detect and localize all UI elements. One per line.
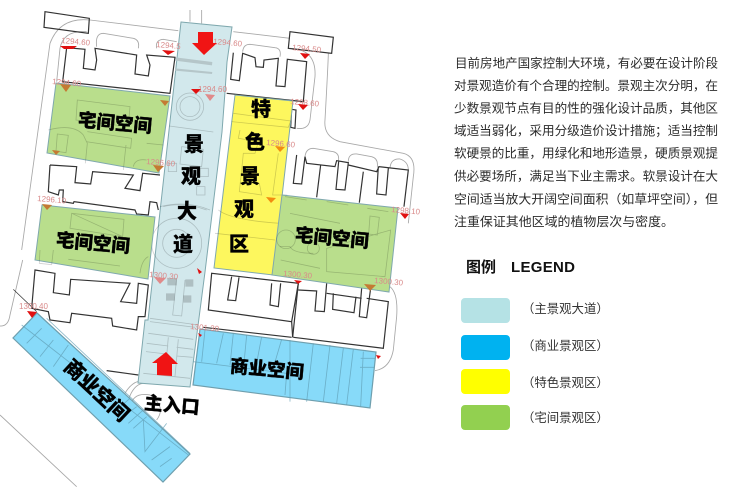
elevation markers: 1294.50 (292, 43, 322, 55)
label: landscape avenue: 景 (184, 134, 204, 156)
label: feature landscape area: 观 (234, 199, 254, 221)
zone: main landscape avenue (138, 22, 232, 387)
legend item: main avenue: （主景观大道） (522, 302, 609, 316)
zone: commercial space south (193, 329, 376, 408)
label: feature landscape area: 特 (251, 98, 271, 121)
label: commercial space south-west: 商业空间 (59, 354, 134, 426)
zone: commercial space south-west (13, 313, 190, 482)
description text block: 软硬景的比重，用绿化和地形造景，硬质景观提 (454, 146, 719, 160)
description text block: 对景观造价有个合理的控制。景观主次分明，在 (454, 78, 718, 93)
description text block: 空间适当放大开阔空间面积（如草坪空间），但 (454, 192, 718, 206)
legend item: commercial landscape (461, 335, 609, 360)
legend title: 图例 (466, 259, 496, 276)
label: commercial space south: 商业空间 (229, 355, 305, 383)
label: landscape avenue (173, 134, 204, 256)
legend (461, 259, 609, 430)
legend item: residential landscape: （宅间景观区） (522, 410, 609, 425)
label: landscape avenue: 道 (173, 232, 193, 256)
elevation markers: 1300.30 (374, 276, 404, 288)
site plan (0, 10, 421, 487)
description text block: 少数景观节点有目的性的强化设计品质，其他区 (454, 100, 718, 116)
elevation markers: 1296.60 (266, 138, 296, 150)
description text block (454, 56, 719, 229)
description text block: 目前房地产国家控制大环境，有必要在设计阶段 (455, 56, 718, 70)
legend item: residential landscape (461, 405, 609, 430)
legend title: LEGEND (511, 259, 575, 276)
zone: feature landscape (214, 95, 293, 275)
zone: residential space east (272, 195, 398, 292)
elevation markers: 1298.10 (391, 205, 421, 217)
elevation markers: 1301.30 (190, 322, 220, 334)
legend item: commercial landscape: （商业景观区） (522, 338, 609, 353)
label: main entrance: 主入口 (143, 392, 201, 418)
elevation markers: 1294.60 (213, 37, 243, 49)
legend item: feature landscape (461, 369, 609, 394)
residential buildings (13, 12, 408, 375)
description text block: 供必要场所，满足当下业主需求。软景设计在大 (454, 168, 718, 184)
elevation markers (19, 36, 421, 359)
elevation markers: 1298.60 (290, 97, 320, 109)
label: residential space west: 宅间空间 (55, 229, 131, 257)
zone: residential space west (35, 205, 155, 279)
elevation markers: 1296.60 (146, 157, 176, 169)
arrow: main entrance pointing up (152, 352, 178, 376)
zone: residential space north-west (47, 83, 170, 173)
label: feature landscape area: 区 (229, 234, 249, 256)
legend item: feature landscape: （特色景观区） (522, 375, 609, 390)
description text block: 域适当弱化，采用分级造价设计措施；适当控制 (454, 123, 718, 138)
road network (0, 10, 414, 487)
label: residential space east: 宅间空间 (294, 224, 370, 252)
elevation markers: 1294.60 (61, 36, 91, 48)
elevation markers: 1294.5 (156, 40, 182, 51)
elevation markers: 1300.40 (19, 302, 48, 311)
elevation markers: 1300.30 (149, 270, 179, 282)
elevation markers: 1294.60 (198, 85, 227, 94)
label: feature landscape area (229, 98, 271, 256)
label: feature landscape area: 景 (240, 166, 260, 188)
label: landscape avenue: 观 (181, 166, 201, 188)
label: landscape avenue: 大 (177, 200, 197, 223)
label: feature landscape area: 色 (245, 130, 265, 154)
label: residential space north-west: 宅间空间 (77, 109, 153, 137)
elevation markers: 1300.30 (283, 269, 313, 281)
legend item: main avenue (461, 298, 609, 323)
arrow: north entry pointing down (192, 32, 217, 55)
elevation markers: 1296.10 (37, 194, 67, 206)
elevation markers: 1294.60 (52, 77, 82, 89)
description text block: 注重保证其他区域的植物层次与密度。 (454, 214, 674, 229)
